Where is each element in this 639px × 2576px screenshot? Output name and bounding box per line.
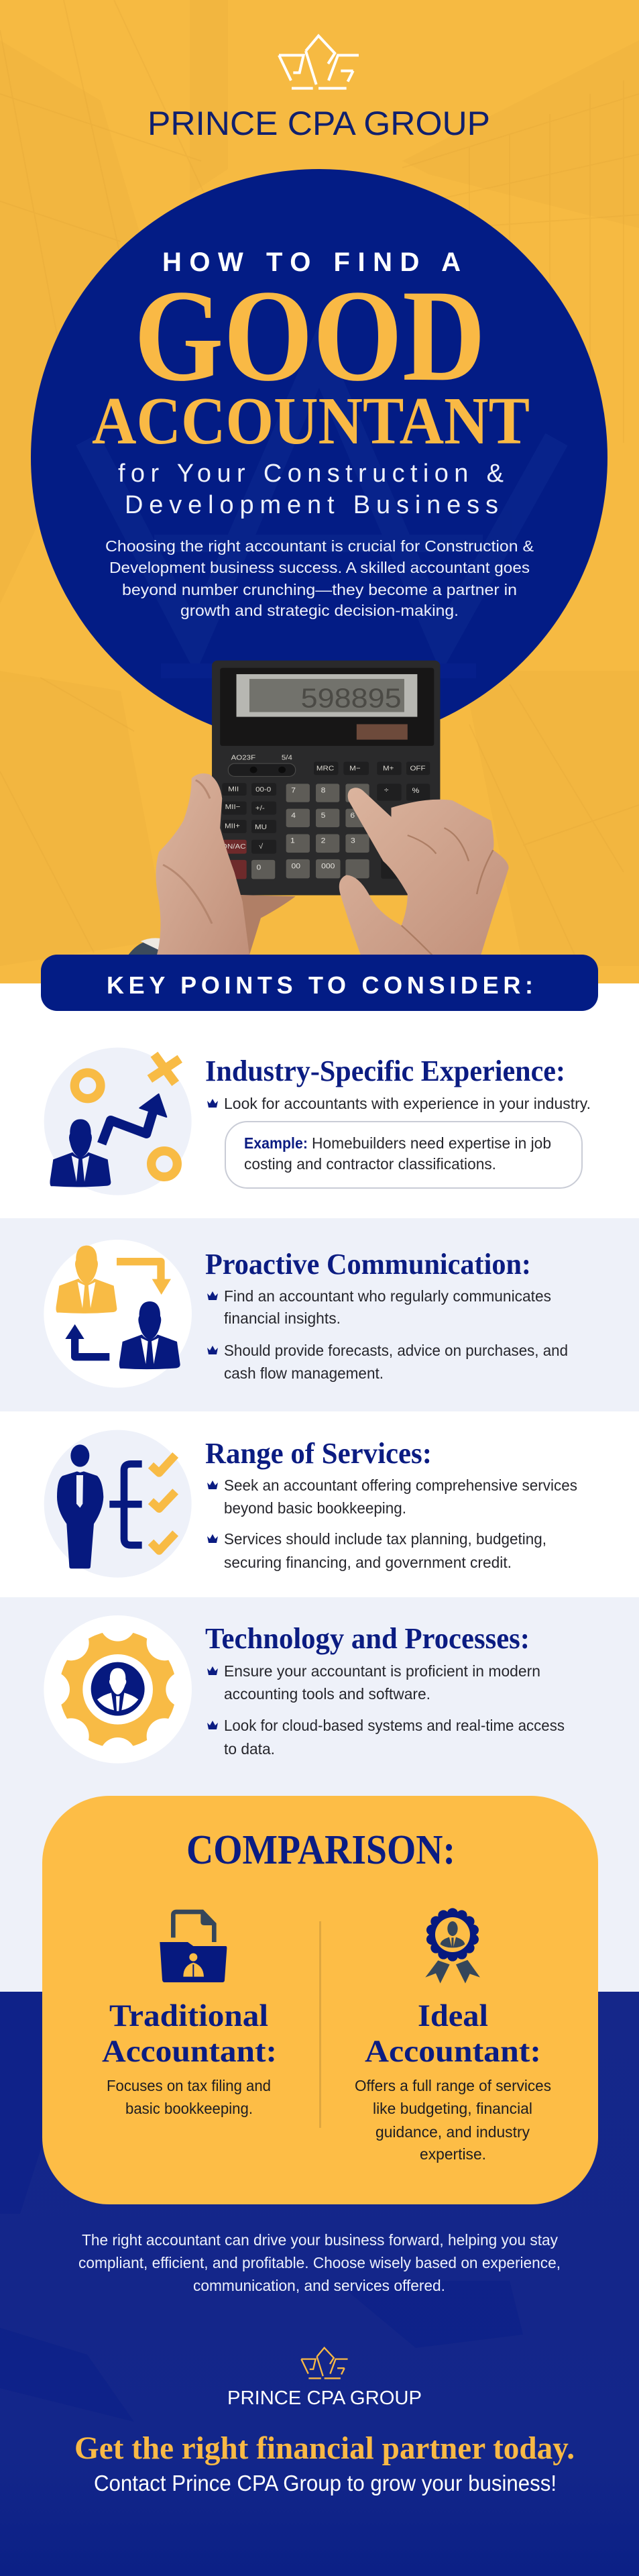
calculator key labels: MII+ xyxy=(225,822,240,830)
photo: calculator and hands xyxy=(128,661,509,956)
bullet: look for accountants: Look for accountants with experience in your industry. xyxy=(224,1095,591,1112)
calculator key labels: % xyxy=(412,788,419,795)
calculator key labels: 000 xyxy=(321,863,335,870)
callout: example: Example: xyxy=(244,1134,308,1152)
calculator key labels xyxy=(221,765,426,872)
bullets: range of services: Services should include tax planning, budgeting, xyxy=(224,1530,546,1548)
banner: key points xyxy=(41,955,598,1011)
panel: navy footer background xyxy=(0,1992,639,2576)
heading: industry-specific experience: Industry-Specific Experience: xyxy=(205,1055,565,1087)
calculator key labels: 00 xyxy=(292,863,300,870)
banner: key points: KEY POINTS TO CONSIDER: xyxy=(107,971,533,999)
calculator key labels: 8 xyxy=(321,787,325,794)
bullets: technology and processes: Ensure your accountant is proficient in modern xyxy=(224,1662,540,1680)
title: how to find a: HOW TO FIND A xyxy=(162,248,461,277)
closing paragraph: communication, and services offered. xyxy=(193,2277,445,2294)
calculator key labels: √ xyxy=(259,843,264,851)
calculator body: 5/4 xyxy=(282,754,292,762)
bullets: proactive communication: cash flow management. xyxy=(224,1364,384,1382)
heading: traditional accountant xyxy=(102,1998,277,2069)
call to action heading: Get the right financial partner today. xyxy=(74,2430,575,2466)
calculator key labels: 00-0 xyxy=(255,786,271,794)
bullets: technology and processes: accounting tools and software. xyxy=(224,1685,430,1703)
calculator key labels: MU xyxy=(255,823,267,831)
closing paragraph: The right accountant can drive your business forward, helping you stay xyxy=(82,2231,558,2249)
heading: proactive communication: Proactive Communication: xyxy=(205,1248,531,1281)
closing paragraph xyxy=(78,2231,561,2294)
text: traditional description: Focuses on tax filing and xyxy=(107,2077,271,2094)
panel: range of services xyxy=(0,1411,639,1597)
icon: services checklist xyxy=(44,1430,192,1578)
subtitle: for Your Construction & xyxy=(118,460,504,488)
calculator key labels: 0 xyxy=(257,864,261,872)
calculator body: AO23F xyxy=(231,754,255,762)
calculator key labels: 2 xyxy=(321,837,325,845)
calculator key labels: 7 xyxy=(291,787,296,794)
bullets: proactive communication: Find an accountant who regularly communicates xyxy=(224,1287,551,1305)
heading: comparison: COMPARISON: xyxy=(186,1827,455,1873)
divider xyxy=(319,1921,321,2128)
subtitle xyxy=(118,460,504,519)
calculator key labels: MRC xyxy=(316,765,334,772)
heading: ideal accountant: Accountant: xyxy=(365,2034,541,2069)
calculator key labels: M− xyxy=(349,765,361,772)
panel: comparison card xyxy=(42,1796,598,2204)
bullets: technology and processes: Look for cloud-based systems and real-time access xyxy=(224,1717,565,1734)
calculator key labels: M+ xyxy=(383,765,394,772)
calculator key labels: 6 xyxy=(350,812,355,820)
intro paragraph: Development business success. A skilled accountant goes xyxy=(109,559,530,576)
icon: growth chart and accountant xyxy=(44,1048,192,1195)
intro paragraph xyxy=(105,537,534,619)
heading: technology and processes: Technology and Processes: xyxy=(205,1622,530,1655)
calculator key labels: ÷ xyxy=(384,786,389,794)
callout: example: Homebuilders need expertise in job xyxy=(312,1134,551,1152)
callout: example xyxy=(225,1122,582,1188)
calculator key labels: OFF xyxy=(410,765,426,772)
calculator key labels: +/- xyxy=(255,804,265,812)
icon: award ribbon xyxy=(425,1908,480,1984)
heading: range of services: Range of Services: xyxy=(205,1437,432,1470)
text: ideal description: like budgeting, financial xyxy=(373,2100,532,2117)
bullets: proactive communication: Should provide forecasts, advice on purchases, and xyxy=(224,1342,568,1359)
left hand xyxy=(128,773,296,956)
intro paragraph: growth and strategic decision-making. xyxy=(180,602,459,619)
text: traditional description xyxy=(107,2077,271,2117)
bullets: proactive communication xyxy=(207,1287,568,1382)
text: traditional description: basic bookkeeping. xyxy=(125,2100,253,2117)
bullets: range of services: beyond basic bookkeeping. xyxy=(224,1499,406,1517)
footer brand name: PRINCE CPA GROUP xyxy=(227,2387,422,2409)
heading: ideal accountant: Ideal xyxy=(418,1998,488,2033)
intro paragraph: beyond number crunching—they become a partner in xyxy=(122,581,517,598)
calculator key labels: 3 xyxy=(351,837,355,845)
heading: traditional accountant: Accountant: xyxy=(102,2034,277,2069)
bullets: proactive communication: financial insights. xyxy=(224,1309,341,1327)
subtitle: Development Business xyxy=(125,491,498,519)
bullets: range of services: securing financing, and government credit. xyxy=(224,1554,512,1571)
icon: folder with document xyxy=(160,1912,227,1982)
title: accountant: ACCOUNTANT xyxy=(92,383,530,458)
bullets: range of services xyxy=(207,1477,577,1571)
title: good: GOOD xyxy=(134,263,485,409)
calculator key labels: MII− xyxy=(225,804,240,811)
calculator body: 598895 xyxy=(301,683,402,714)
bullets: technology and processes xyxy=(207,1662,565,1758)
right hand xyxy=(339,788,509,955)
logo: footer crown mark xyxy=(301,2348,348,2378)
logo: crown mark xyxy=(279,36,359,89)
closing paragraph: compliant, efficient, and profitable. Choose wisely based on experience, xyxy=(78,2254,561,2271)
bullets: range of services: Seek an accountant offering comprehensive services xyxy=(224,1477,577,1494)
calculator keys xyxy=(222,761,430,879)
calculator body xyxy=(212,661,440,896)
calculator key labels: 5 xyxy=(321,812,325,820)
icon: two-way communication xyxy=(44,1240,192,1388)
calculator key labels: 1 xyxy=(290,837,295,845)
heading: traditional accountant: Traditional xyxy=(109,1998,268,2033)
panel: proactive communication xyxy=(0,1218,639,1411)
bullets: technology and processes: to data. xyxy=(224,1740,275,1758)
text: ideal description xyxy=(355,2077,551,2163)
intro paragraph: Choosing the right accountant is crucial for Construction & xyxy=(105,537,534,555)
calculator key labels: MII xyxy=(228,786,239,793)
call to action text: Contact Prince CPA Group to grow your business! xyxy=(94,2471,557,2496)
panel: technology and processes xyxy=(0,1597,639,1992)
panel: page white area xyxy=(0,983,639,1218)
heading: ideal accountant xyxy=(365,1998,541,2069)
icon: gear with accountant xyxy=(44,1615,192,1764)
callout: example: costing and contractor classifications. xyxy=(244,1155,496,1173)
calculator key labels: ON/AC xyxy=(221,843,246,851)
text: ideal description: Offers a full range of services xyxy=(355,2077,551,2094)
brand name: PRINCE CPA GROUP xyxy=(148,105,490,142)
panel: navy hero circle xyxy=(31,169,607,746)
calculator key labels: 4 xyxy=(291,812,296,820)
text: ideal description: expertise. xyxy=(420,2145,486,2163)
panel: yellow header background xyxy=(0,0,639,983)
text: ideal description: guidance, and industry xyxy=(375,2123,530,2141)
